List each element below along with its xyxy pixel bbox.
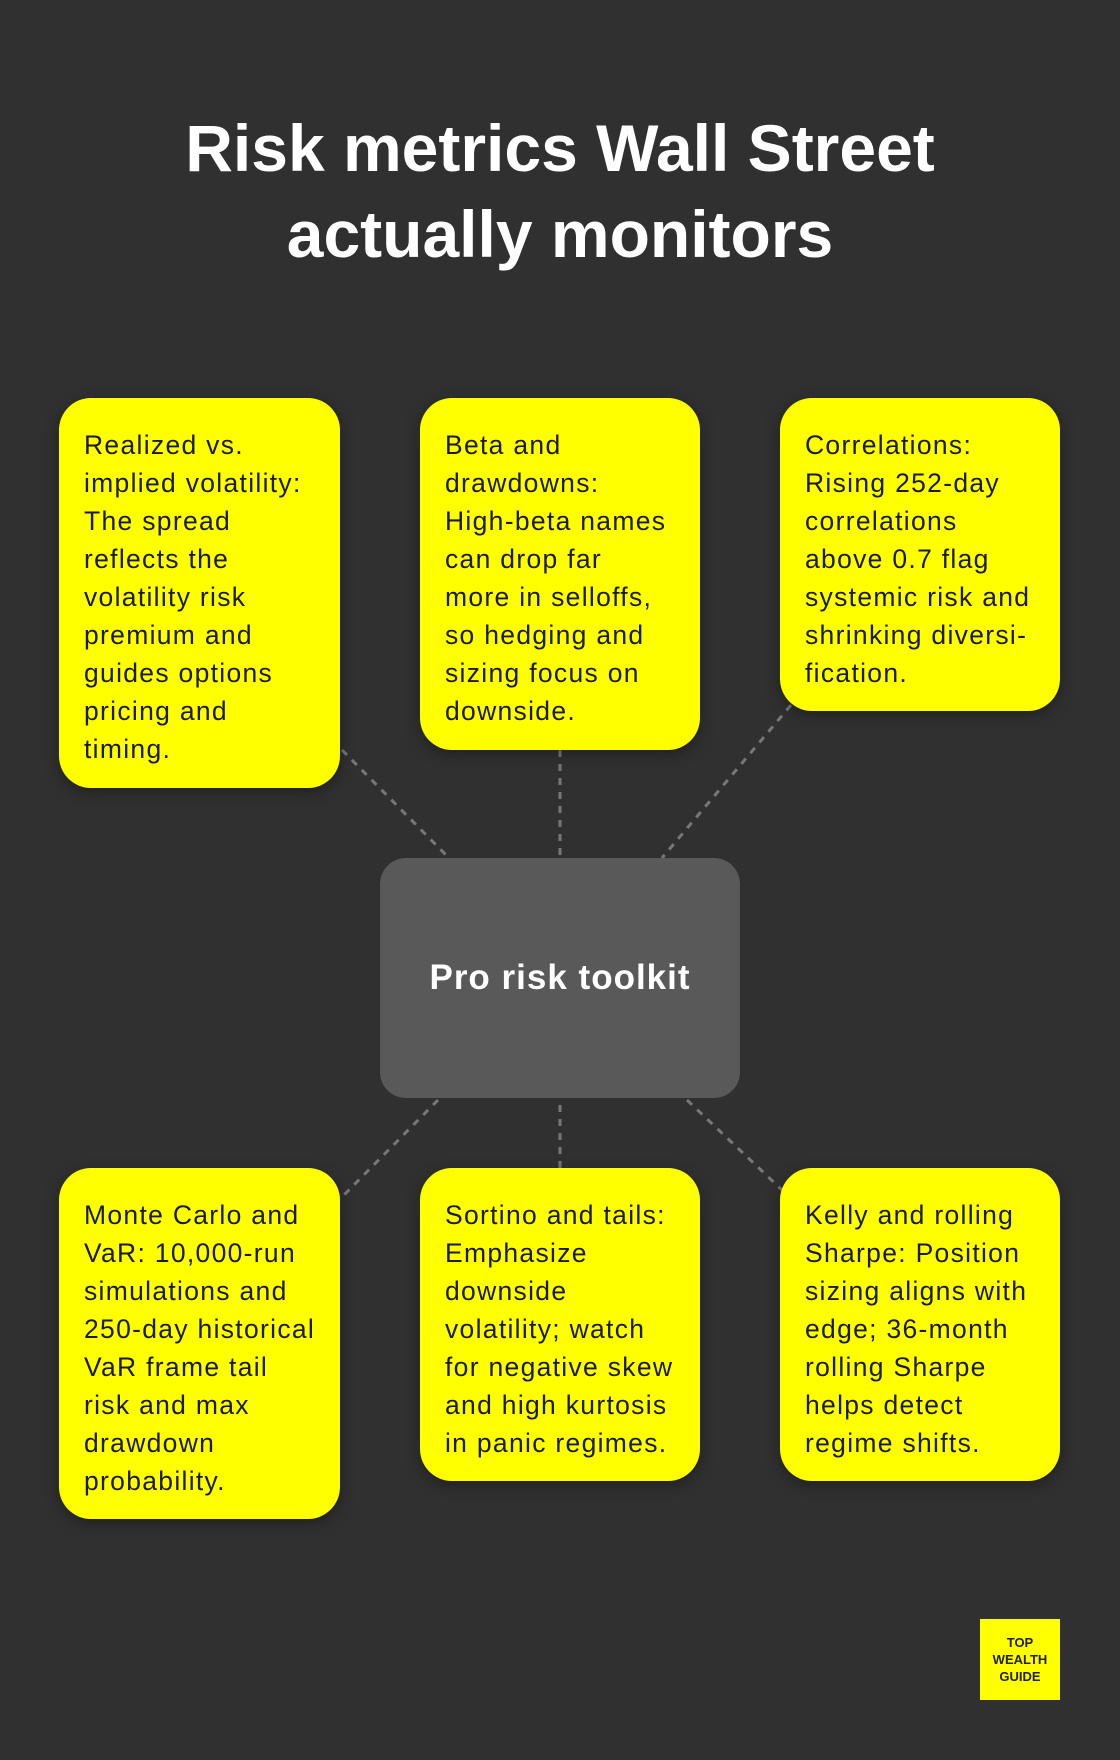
panel: kelly and rolling sharpe: sizing aligns with	[805, 1276, 1027, 1306]
panel: correlations	[780, 398, 1060, 711]
panel: sortino and tails: in panic regimes.	[445, 1428, 667, 1458]
panel: beta and drawdowns: High-beta names	[445, 506, 666, 536]
panel: kelly and rolling sharpe: regime shifts.	[805, 1428, 981, 1458]
panel: correlations: Rising 252-day	[805, 468, 1000, 498]
panel: beta and drawdowns	[420, 398, 700, 750]
panel: kelly and rolling sharpe	[780, 1168, 1060, 1481]
panel: monte carlo and VaR: 250-day historical	[84, 1314, 315, 1344]
logo: GUIDE	[999, 1669, 1041, 1684]
panel: beta and drawdowns: so hedging and	[445, 620, 644, 650]
panel: kelly and rolling sharpe: Kelly and rolling	[805, 1200, 1014, 1230]
panel: realized vs implied volatility	[59, 398, 340, 788]
panel: sortino and tails: Emphasize	[445, 1238, 588, 1268]
title: Risk metrics Wall Street	[185, 111, 935, 185]
panel: beta and drawdowns: sizing focus on	[445, 658, 640, 688]
panel: sortino and tails: volatility; watch	[445, 1314, 645, 1344]
panel: correlations: fication.	[805, 658, 908, 688]
panel: realized vs implied volatility: reflects the	[84, 544, 229, 574]
panel: kelly and rolling sharpe: Sharpe: Position	[805, 1238, 1020, 1268]
panel: sortino and tails: and high kurtosis	[445, 1390, 667, 1420]
panel: beta and drawdowns: Beta and	[445, 430, 562, 460]
panel: kelly and rolling sharpe: edge; 36-month	[805, 1314, 1009, 1344]
title: actually monitors	[287, 197, 833, 271]
panel: correlations: shrinking diversi-	[805, 620, 1027, 650]
logo	[980, 1619, 1060, 1700]
panel: sortino and tails: downside	[445, 1276, 567, 1306]
panel: sortino and tails: for negative skew	[445, 1352, 673, 1382]
panel: beta and drawdowns: downside.	[445, 696, 576, 726]
title	[185, 111, 935, 271]
panel: correlations: systemic risk and	[805, 582, 1030, 612]
panel: realized vs implied volatility: guides options	[84, 658, 273, 688]
logo: TOP	[1007, 1635, 1033, 1650]
panel: sortino and tails	[420, 1168, 700, 1481]
panel: monte carlo and VaR: VaR: 10,000-run	[84, 1238, 296, 1268]
panel: beta and drawdowns: drawdowns:	[445, 468, 599, 498]
panel: realized vs implied volatility: Realized vs.	[84, 430, 244, 460]
panel: monte carlo and VaR: drawdown	[84, 1428, 215, 1458]
panel: beta and drawdowns: can drop far	[445, 544, 602, 574]
panel: realized vs implied volatility: premium and	[84, 620, 253, 650]
panel: kelly and rolling sharpe: helps detect	[805, 1390, 964, 1420]
panel: monte carlo and VaR: simulations and	[84, 1276, 288, 1306]
panel: realized vs implied volatility: timing.	[84, 734, 171, 764]
panel: realized vs implied volatility: volatility risk	[84, 582, 246, 612]
panel: sortino and tails: Sortino and tails:	[445, 1200, 666, 1230]
panel: beta and drawdowns: more in selloffs,	[445, 582, 652, 612]
panel: correlations: Correlations:	[805, 430, 972, 460]
panel: monte carlo and VaR: probability.	[84, 1466, 226, 1496]
panel: monte carlo and VaR: Monte Carlo and	[84, 1200, 299, 1230]
panel: monte carlo and VaR: risk and max	[84, 1390, 250, 1420]
panel: realized vs implied volatility: implied volatility:	[84, 468, 302, 498]
panel: monte carlo and VaR: VaR frame tail	[84, 1352, 268, 1382]
panel: correlations: above 0.7 flag	[805, 544, 990, 574]
panel: monte carlo and VaR	[59, 1168, 340, 1519]
panel: realized vs implied volatility: The spread	[84, 506, 231, 536]
panel: correlations: correlations	[805, 506, 958, 536]
logo: WEALTH	[993, 1652, 1047, 1667]
panel: kelly and rolling sharpe: rolling Sharpe	[805, 1352, 987, 1382]
center hub: Pro risk toolkit	[429, 958, 691, 997]
center hub	[380, 858, 740, 1098]
panel: realized vs implied volatility: pricing and	[84, 696, 228, 726]
